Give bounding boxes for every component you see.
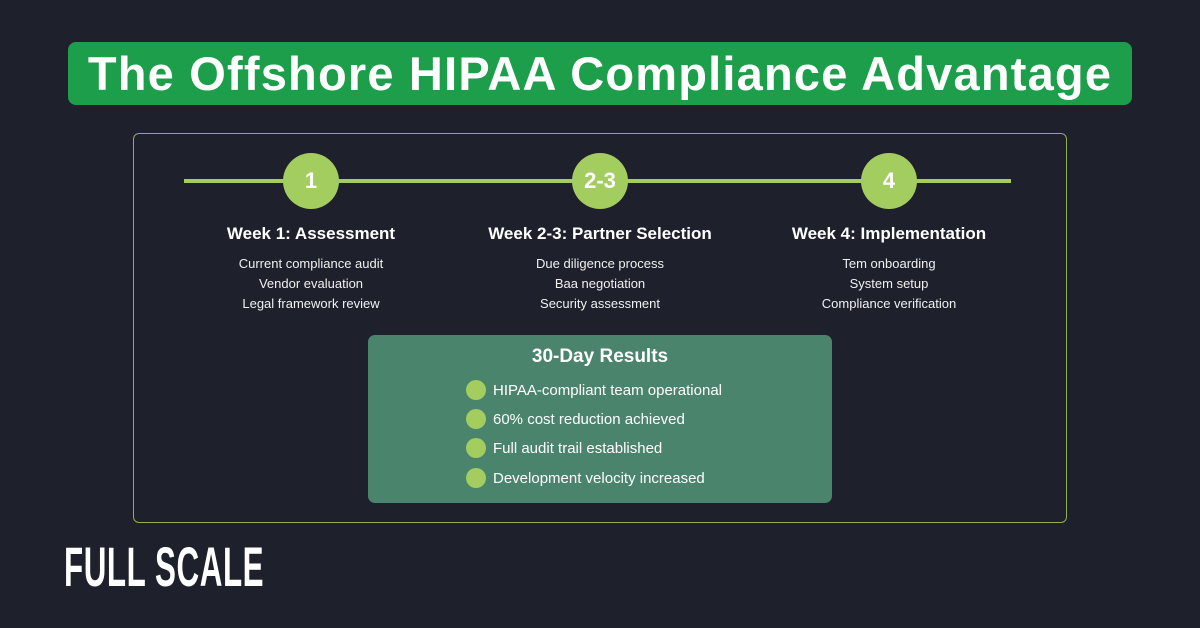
result item: Development velocity increased [493,470,705,487]
step circle 4: 4 [883,168,895,193]
step 4 text [792,224,986,311]
step 1 text: Week 1: Assessment [227,224,395,243]
step circle 1 [283,153,339,209]
step 2-3 text: Baa negotiation [555,276,645,291]
step 4 text: Tem onboarding [842,256,936,271]
result item: HIPAA-compliant team operational [493,382,722,399]
step 1 text [226,224,395,311]
step 2-3 text: Due diligence process [536,256,664,271]
step 2-3 text: Security assessment [540,296,660,311]
results heading: 30-Day Results [532,346,668,367]
step 4 text: Week 4: Implementation [792,224,986,243]
results box [368,335,832,503]
step 1 text: Current compliance audit [239,256,383,271]
step 2-3 text: Week 2-3: Partner Selection [488,224,712,243]
step circle 1: 1 [305,168,317,193]
step circle 2-3: 2-3 [584,168,616,193]
logo: FULL SCALE [64,535,264,598]
result item: 60% cost reduction achieved [493,411,685,428]
step circle 4 [861,153,917,209]
step 4 text: System setup [850,276,928,291]
step 2-3 text [488,224,712,311]
result item: Full audit trail established [493,440,662,457]
step 1 text: Vendor evaluation [259,276,363,291]
panel: timeline [133,133,1067,523]
step 4 text: Compliance verification [822,296,956,311]
title: The Offshore HIPAA Compliance Advantage [88,47,1112,100]
step 1 text: Legal framework review [242,296,380,311]
step circle 2-3 [572,153,628,209]
timeline line [184,179,1011,183]
